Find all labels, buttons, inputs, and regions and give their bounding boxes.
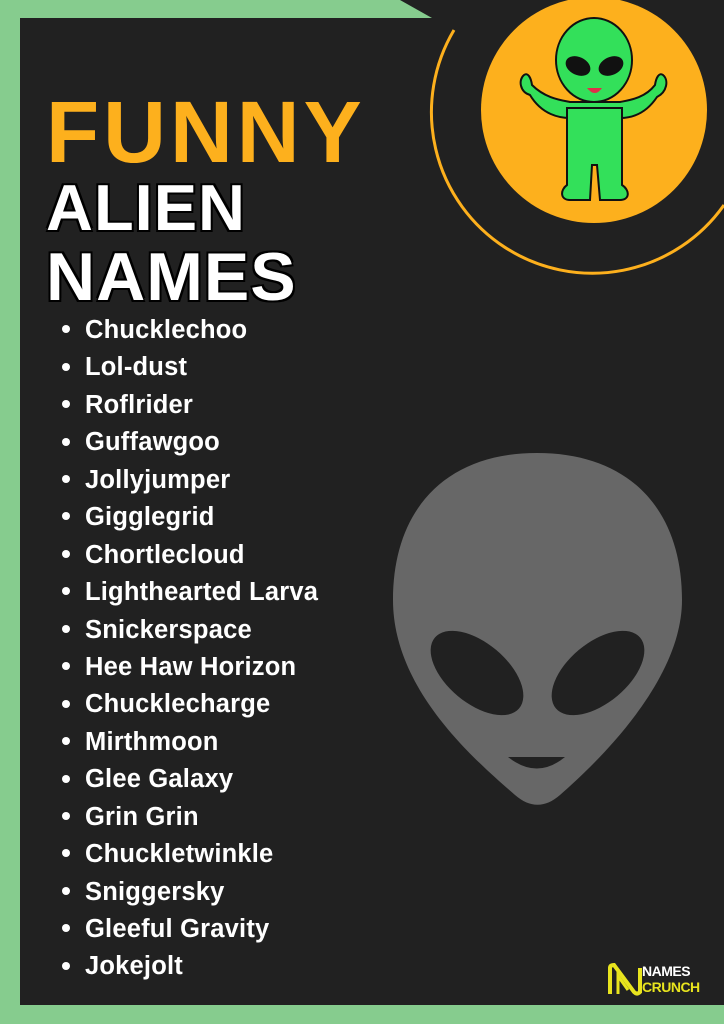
list of funny alien names: Hee Haw Horizon bbox=[85, 653, 296, 681]
logo: names crunch: NAMES bbox=[642, 963, 690, 979]
list of funny alien names: Lol-dust bbox=[85, 353, 187, 381]
icon: green alien in orange circle bbox=[430, 0, 724, 275]
list of funny alien names: Snickerspace bbox=[85, 616, 252, 644]
top green corner strip bbox=[20, 0, 432, 18]
list of funny alien names: Sniggersky bbox=[85, 878, 224, 906]
list of funny alien names: Mirthmoon bbox=[85, 728, 219, 756]
list of funny alien names: Roflrider bbox=[85, 391, 193, 419]
list of funny alien names: Gigglegrid bbox=[85, 503, 214, 531]
icon: grey alien head bbox=[393, 453, 682, 805]
list of funny alien names: Grin Grin bbox=[85, 803, 199, 831]
list of funny alien names: Chucklecharge bbox=[85, 690, 270, 718]
logo: names crunch: CRUNCH bbox=[642, 979, 700, 995]
list of funny alien names: Lighthearted Larva bbox=[85, 578, 318, 606]
list of funny alien names: Gleeful Gravity bbox=[85, 915, 269, 943]
list of funny alien names: Guffawgoo bbox=[85, 428, 220, 456]
title: NAMES: NAMES bbox=[46, 239, 297, 315]
list of funny alien names bbox=[62, 316, 318, 980]
title: ALIEN: ALIEN bbox=[46, 171, 246, 244]
title: FUNNY: FUNNY bbox=[46, 84, 366, 181]
list of funny alien names: Jokejolt bbox=[85, 952, 183, 980]
list of funny alien names: Chuckletwinkle bbox=[85, 840, 273, 868]
list of funny alien names: Chortlecloud bbox=[85, 541, 245, 569]
list of funny alien names: Chucklechoo bbox=[85, 316, 247, 344]
list of funny alien names: Jollyjumper bbox=[85, 466, 230, 494]
logo: names crunch bbox=[608, 963, 700, 996]
list of funny alien names: Glee Galaxy bbox=[85, 765, 233, 793]
